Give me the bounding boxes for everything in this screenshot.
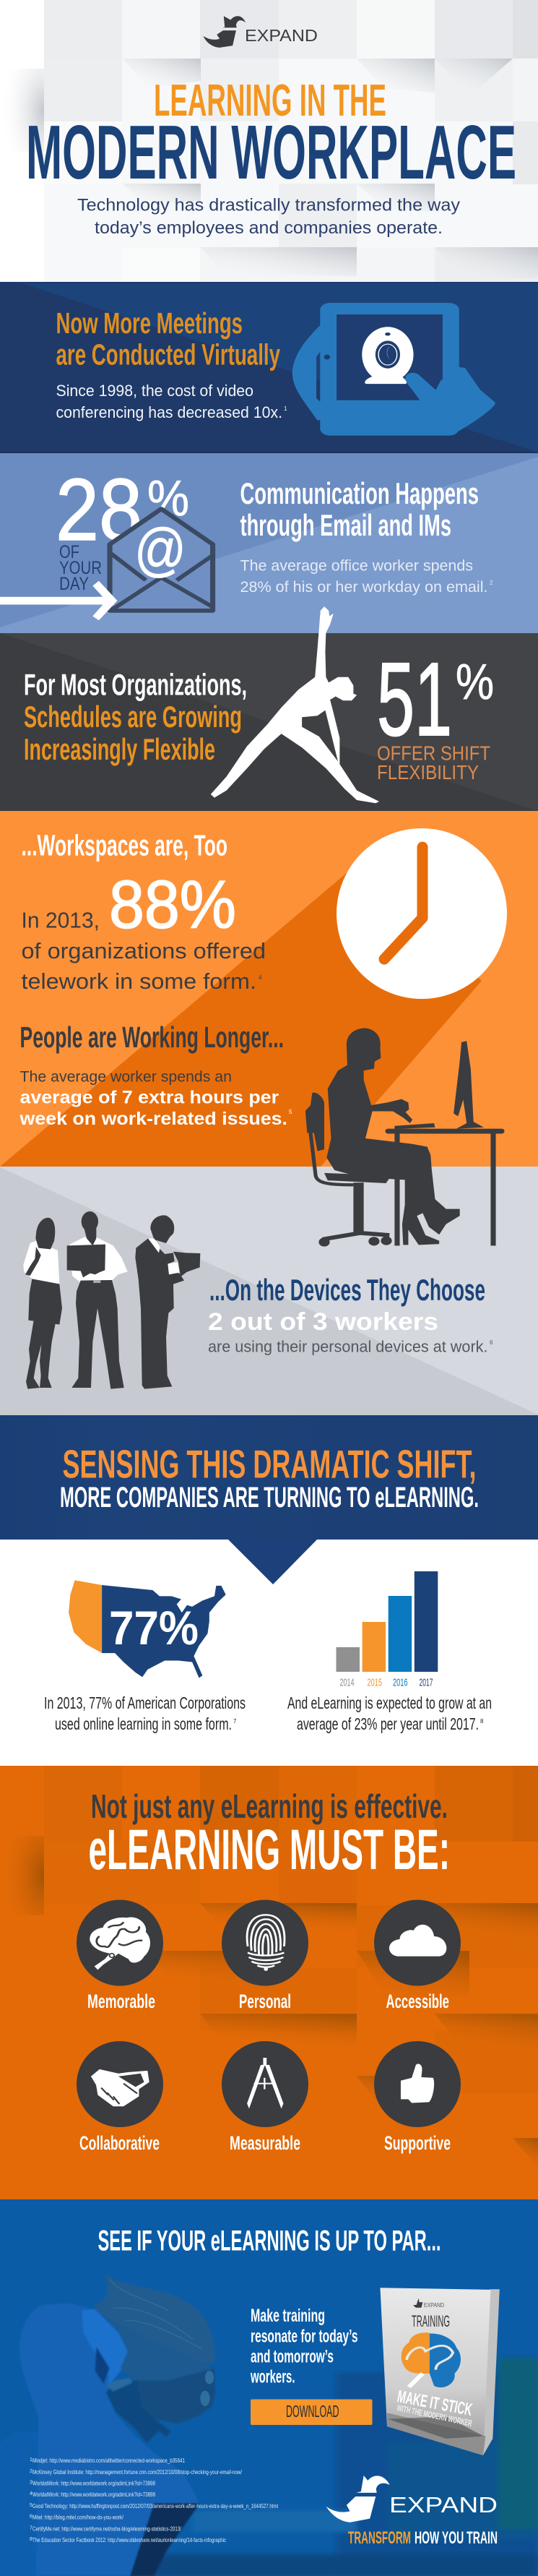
body text: make training resonate: Make training: [251, 2306, 325, 2326]
panel: elearning must be: [0, 1766, 538, 2199]
panel: workspaces and longer hours: [0, 811, 538, 1167]
caption: american corporations: In 2013, 77% of American Corporations: [44, 1693, 246, 1712]
subtitle: Technology has drastically transformed the way: [77, 195, 461, 215]
stat: 51% shift flexibility: FLEXIBILITY: [377, 761, 479, 783]
footnotes: sources: Good Technology: http://www.huffingtonpost.com/2012/07/03/americans-work-after-hours-extra-day-a-week_n_1644527.html: [32, 2502, 278, 2510]
item: accessible: Accessible: [386, 1991, 449, 2012]
stat: 28% of your day: [56, 460, 189, 594]
footnotes: sources: 8: [30, 2537, 32, 2542]
subtitle: [77, 195, 461, 238]
body text: make training resonate: resonate for today’s: [251, 2326, 358, 2346]
body text: email workday: 2: [490, 580, 493, 586]
bar chart: elearning growth: 2015: [367, 1677, 382, 1688]
bar chart: elearning growth: 2016: [393, 1677, 407, 1688]
illustration: woman working at desk: [305, 1029, 504, 1247]
footnotes: sources: The Education Sector Factbook 2012: http://www.slideshare.net/aurionlearning/14-facts-infographic: [32, 2536, 227, 2543]
footnotes: sources: 4: [30, 2491, 32, 2496]
caption: american corporations: used online learning in some form.: [55, 1714, 232, 1733]
body text: extra hours: week on work-related issues.: [19, 1109, 287, 1129]
illustration: yoga figure: [211, 606, 379, 803]
stat: 88% telework: of organizations offered: [22, 938, 266, 963]
illustration: ebook cover: WITH THE MODERN WORKER: [396, 2403, 473, 2429]
panel: hero header: [0, 0, 538, 282]
photo: stressed worker: [0, 2272, 215, 2576]
footnotes: sources: 7: [30, 2525, 32, 2531]
footnotes: sources: Mitel: http://blog.mitel.com/how-do-you-work/: [32, 2514, 123, 2521]
subtitle: today’s employees and companies operate.: [95, 218, 443, 238]
button: download: [251, 2400, 373, 2425]
item: collaborative: Collaborative: [79, 2132, 160, 2154]
footnotes: sources: Mindjet: http://www.mediabistro.com/alltwitter/connected-workspace_b35641: [32, 2457, 185, 2464]
body text: extra hours: [19, 1068, 292, 1129]
item: accessible: [374, 1899, 461, 2012]
body text: make training resonate: and tomorrow’s: [251, 2346, 334, 2366]
stat: 2 out of 3 workers: 2 out of 3 workers: [208, 1308, 438, 1336]
body text: extra hours: average of 7 extra hours per: [20, 1087, 279, 1107]
footnotes: sources: 1: [30, 2457, 32, 2463]
body text: personal devices: are using their personal devices at work.: [208, 1337, 488, 1356]
logo: expand: EXPAND: [245, 26, 318, 45]
body text: email workday: 28% of his or her workday on email.: [240, 578, 488, 596]
stat: 88% telework: 4: [259, 974, 262, 981]
panel: flexible schedules: [0, 606, 538, 811]
stat: 28% of your day: 28: [56, 460, 142, 559]
body text: extra hours: The average worker spends an: [20, 1068, 232, 1086]
tagline: transform how you train: TRANSFORM: [348, 2528, 411, 2548]
body text: extra hours: 5: [289, 1109, 292, 1115]
caption: elearning growth: 8: [480, 1718, 484, 1725]
stat: 88% telework: telework in some form.: [22, 969, 256, 994]
footnotes: sources: WorldatWork: http://www.worldatwork.org/adimLink?id=73898: [32, 2491, 155, 2498]
button: download: DOWNLOAD: [286, 2402, 339, 2421]
footnotes: sources: [30, 2457, 278, 2543]
illustration: ebook cover: [380, 2288, 500, 2455]
heading: virtual meetings: [56, 306, 280, 372]
chart: US map 77%: 77%: [109, 1601, 199, 1654]
body text: email workday: The average office worker spends: [240, 557, 473, 574]
logo: expand white: [326, 2476, 498, 2523]
stat: 51% shift flexibility: 51: [377, 641, 452, 757]
panel: email and IMs: [0, 453, 538, 633]
footnotes: sources: CertifyMe.net: http://www.certifyme.net/osha-blog/elearning-statistics-2013/: [32, 2525, 181, 2533]
panel: elearning adoption: [44, 1571, 492, 1733]
stat: 28% of your day: DAY: [59, 574, 89, 594]
panel: personal devices: [0, 1167, 538, 1415]
item: measurable: Measurable: [230, 2132, 300, 2154]
panel: dramatic shift banner: [0, 1415, 538, 1584]
logo: expand: [203, 16, 318, 48]
heading: flexible schedules: Schedules are Growing: [24, 700, 242, 734]
icon: open envelope with at sign: @: [134, 517, 186, 583]
stat: 88% telework: [22, 866, 266, 994]
stat: 88% telework: 88%: [109, 866, 236, 943]
caption: elearning growth: [287, 1693, 492, 1733]
heading: flexible schedules: Increasingly Flexible: [24, 732, 215, 766]
heading: flexible schedules: For Most Organizations,: [24, 668, 247, 701]
stat: 28% of your day: OF: [59, 542, 79, 562]
stat: 28% of your day: YOUR: [59, 558, 102, 578]
arrow: white pointer into envelope: [0, 581, 117, 620]
bar chart: elearning growth: 2017: [419, 1677, 433, 1688]
stat: 28% of your day: %: [147, 470, 189, 526]
caption: american corporations: [44, 1693, 246, 1733]
bar chart: elearning growth: [337, 1571, 438, 1688]
icon: clock: [337, 828, 507, 999]
stat: 51% shift flexibility: %: [456, 653, 494, 710]
heading: flexible schedules: [24, 668, 247, 766]
panel: call to action: [0, 2199, 538, 2576]
heading: communication: [240, 476, 479, 542]
heading: workspaces: ...Workspaces are, Too: [22, 828, 227, 862]
footnotes: sources: 3: [30, 2481, 32, 2485]
illustration: three professionals with devices: [23, 1211, 200, 1389]
footnotes: sources: 2: [30, 2469, 32, 2474]
panel: virtual meetings: [0, 282, 538, 453]
logo: expand white: EXPAND: [389, 2492, 498, 2517]
chart: US map 77%: [69, 1580, 226, 1678]
item: memorable: Memorable: [87, 1991, 155, 2012]
illustration: ebook cover: EXPAND: [424, 2301, 444, 2309]
body text: make training resonate: [250, 2306, 358, 2387]
footnotes: sources: 5: [30, 2503, 32, 2508]
footnotes: sources: 6: [30, 2514, 32, 2520]
photo: office background: [131, 2358, 538, 2576]
body text: video conferencing cost: Since 1998, the cost of video: [56, 382, 253, 400]
body text: video conferencing cost: conferencing has decreased 10x.: [56, 403, 282, 421]
body text: personal devices: 6: [490, 1339, 493, 1346]
stat: 51% shift flexibility: OFFER SHIFT: [377, 742, 490, 765]
bar chart: elearning growth: 2014: [339, 1677, 354, 1688]
caption: american corporations: 7: [233, 1718, 237, 1725]
item: memorable: [77, 1899, 163, 2012]
stat: 88% telework: In 2013,: [22, 908, 100, 932]
body text: video conferencing cost: [56, 382, 287, 421]
icon: tablet with webcam and hands: [292, 303, 495, 436]
illustration: ebook cover: MAKE IT STICK: [396, 2387, 474, 2420]
item: personal: Personal: [239, 1991, 291, 2012]
body text: video conferencing cost: 1: [284, 405, 287, 412]
item: personal: [222, 1899, 308, 2012]
footnotes: sources: McKinsey Global Institute: http://management.fortune.cnn.com/2012/10/08/stop-checking-your-email-now/: [32, 2468, 242, 2476]
title: learning in the: LEARNING IN THE: [154, 76, 386, 126]
body text: make training resonate: workers.: [250, 2366, 295, 2387]
heading: virtual meetings: are Conducted Virtually: [56, 338, 280, 372]
item: measurable: [222, 2041, 308, 2154]
item: supportive: [374, 2041, 461, 2154]
illustration: ebook cover: TRAINING: [412, 2312, 450, 2330]
item: supportive: Supportive: [384, 2132, 451, 2154]
footnotes: sources: WorldatWork: http://www.worldatwork.org/adimLink?id=73898: [32, 2479, 155, 2486]
icon: open envelope with at sign: [110, 509, 213, 611]
heading: working longer: People are Working Longer...: [20, 1021, 284, 1054]
heading: virtual meetings: Now More Meetings: [56, 306, 243, 340]
body text: email workday: [240, 557, 493, 596]
item: collaborative: [77, 2041, 163, 2154]
